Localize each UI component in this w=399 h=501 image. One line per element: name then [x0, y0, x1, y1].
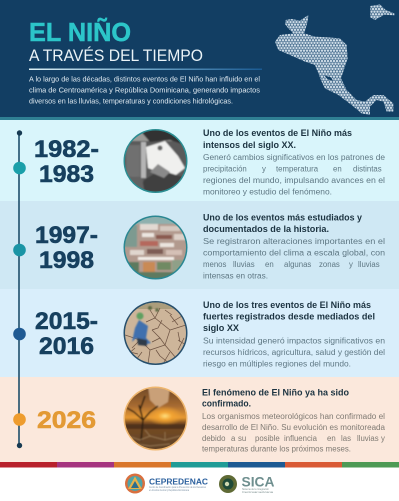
logo: SICA: Sistema de la Integración: [242, 487, 269, 491]
event text: Se registraron alteraciones importantes en el: [203, 237, 385, 246]
event text: y: [349, 260, 353, 269]
year 1997-1998: [35, 222, 98, 274]
header divider: [29, 68, 262, 70]
event text: [203, 128, 385, 196]
event text: posible: [255, 434, 280, 443]
year 1997-1998: 1997-: [35, 222, 98, 249]
event text: su: [238, 434, 246, 443]
year 1982-1983: 1983: [39, 161, 94, 188]
event text: monitoreo y estudio del fenómeno.: [203, 188, 332, 196]
year 2026: 2026: [37, 407, 96, 434]
photo: flooded city: [123, 215, 188, 281]
event text: siglo XX: [203, 323, 239, 333]
event text: en: [333, 164, 342, 174]
event text: influencia: [284, 434, 318, 443]
panel: 2026: [0, 377, 399, 462]
icon: dotted map of Central America and Dominican Republic: [275, 4, 394, 115]
event text: a: [231, 434, 236, 443]
logo: CEPREDENAC: Centro de Coordinación para la Prevención de los Desastres: [149, 486, 207, 489]
logo: SICA: SICA: [242, 474, 275, 490]
event text: intensas en otras.: [203, 272, 268, 280]
event text: y: [381, 434, 385, 443]
logo: CEPREDENAC: CEPREDENAC: [149, 478, 208, 486]
year 2015-2016: 2015-: [35, 308, 98, 335]
photo: person on cracked earth: [123, 300, 188, 366]
event text: zonas: [319, 260, 340, 269]
event text: Uno de los tres eventos de El Niño más: [203, 300, 371, 310]
event text: [202, 388, 386, 454]
header panel: [0, 0, 399, 120]
event text: debido: [202, 434, 226, 443]
event text: riesgo en múltiples regiones del mundo.: [203, 360, 351, 368]
year 1997-1998: 1998: [39, 247, 94, 274]
title: El Niño: EL NIÑO: [29, 17, 131, 47]
event text: Su intensidad generó impactos significativos en: [203, 336, 385, 346]
event text: Uno de los eventos más estudiados y: [203, 212, 362, 222]
intro paragraph: [29, 74, 260, 106]
year 1982-1983: 1982-: [34, 136, 99, 163]
subtitle: A TRAVÉS DEL TIEMPO: [29, 46, 203, 65]
event text: comportamiento del clima a escala global, con: [203, 248, 385, 258]
event text: menos: [203, 260, 227, 269]
event text: [203, 212, 385, 280]
event text: confirmado.: [202, 398, 251, 408]
year 2015-2016: [35, 308, 98, 360]
event text: algunas: [284, 260, 311, 269]
event text: precipitación: [203, 164, 247, 174]
event text: intensos del siglo XX.: [203, 140, 296, 150]
event text: temperaturas durante los próximos meses.: [202, 444, 351, 454]
event text: Uno de los eventos de El Niño más: [203, 128, 352, 138]
event text: fuertes registrados desde mediados del: [203, 312, 375, 322]
event text: lluvias: [358, 260, 380, 269]
event text: Generó cambios significativos en los patrones de: [203, 153, 385, 162]
event text: El fenómeno de El Niño ya ha sido: [202, 388, 349, 398]
logo: SICA: [219, 474, 275, 494]
node 2015: [13, 328, 26, 340]
timeline: [13, 130, 26, 448]
intro paragraph: A lo largo de las décadas, distintos eventos de El Niño han influido en el: [29, 74, 260, 84]
panel: 1997-1998: [0, 201, 399, 289]
node 1982: [13, 162, 26, 174]
panel: 2015-2016: [0, 289, 399, 377]
event text: lluvias: [233, 260, 255, 269]
event text: las: [341, 434, 351, 443]
event text: distintas: [353, 164, 382, 174]
colour stripe: [0, 462, 399, 468]
intro paragraph: diversos en las lluvias, temperaturas y condiciones hidrológicas.: [29, 96, 233, 106]
year 2015-2016: 2016: [39, 333, 94, 360]
logo: SICA: Centroamericana: [242, 490, 273, 494]
event text: Los organismos meteorológicos han confirmado el: [202, 412, 385, 421]
node 1997: [13, 244, 26, 256]
photo: storm damage in black and white: [123, 128, 188, 194]
event text: temperatura: [276, 164, 319, 174]
event text: y: [262, 164, 266, 174]
event text: en: [327, 434, 336, 443]
event text: [203, 300, 385, 368]
year 1982-1983: [34, 136, 99, 188]
photo: sunset over dry land: [123, 386, 188, 452]
event text: recursos hídricos, agricultura, salud y gestión del: [203, 348, 385, 357]
event text: en: [265, 260, 274, 269]
logo: CEPREDENAC: en América Central y República Dominicana: [149, 489, 189, 492]
panel: 1982-1983: [0, 120, 399, 201]
event text: lluvias: [357, 434, 379, 443]
intro paragraph: clima de Centroamérica y República Dominicana, generando impactos: [29, 86, 260, 94]
event text: desarrollo de El Niño. Su evolución es monitoreada: [202, 423, 386, 432]
event text: documentados de la historia.: [203, 224, 329, 234]
event text: regiones del mundo, impulsando avances en el: [203, 176, 385, 185]
logo: CEPREDENAC: [125, 474, 208, 494]
node 2026: [13, 413, 26, 426]
